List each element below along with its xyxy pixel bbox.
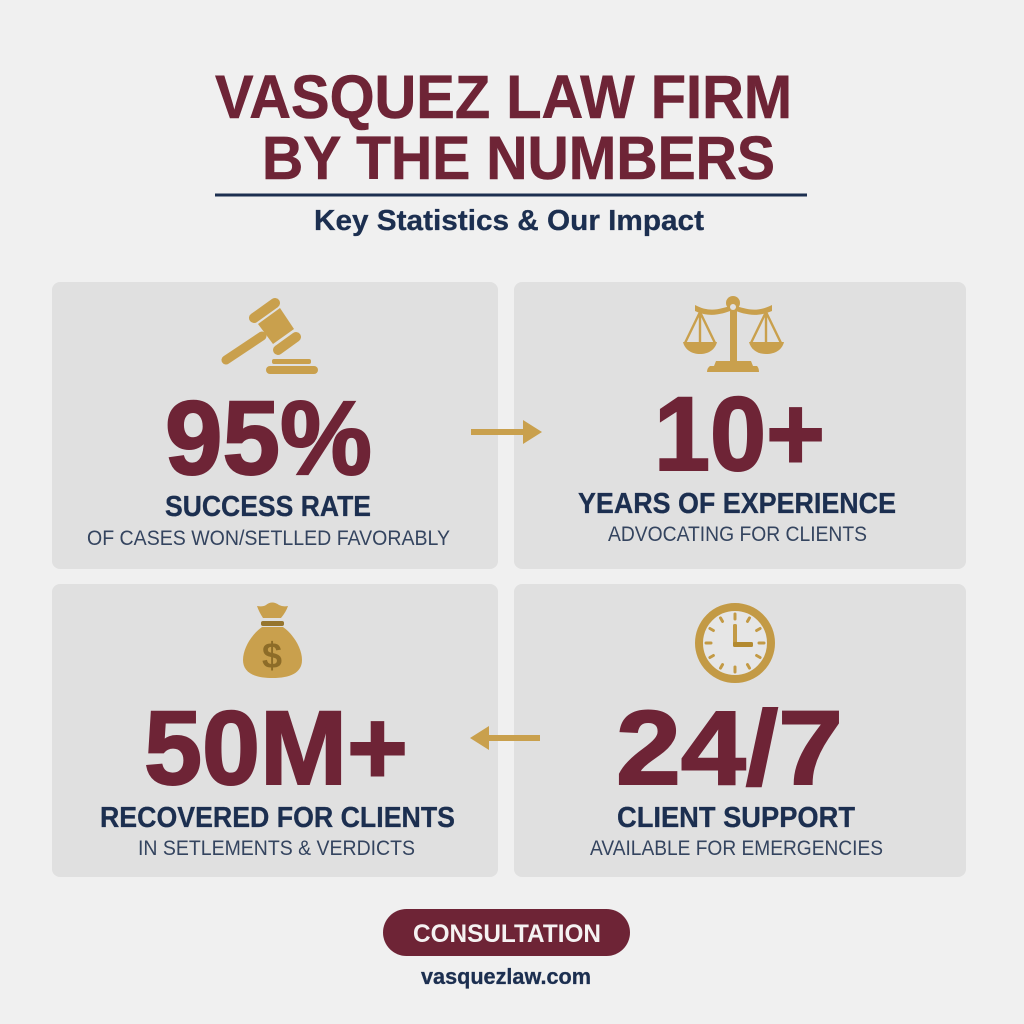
arrow: right: [471, 420, 542, 444]
stat description: AVAILABLE FOR EMERGENCIES: [590, 836, 883, 860]
stat label: success rate: SUCCESS RATE: [165, 491, 371, 523]
stat description: ADVOCATING FOR CLIENTS: [608, 522, 867, 546]
icon: scales of justice: [683, 296, 784, 372]
stat number: 50M+: 50M+: [144, 690, 408, 807]
icon: money bag: [243, 602, 302, 678]
stat number: 95%: 95%: [165, 380, 372, 497]
stat label: client support: CLIENT SUPPORT: [617, 802, 856, 834]
arrow: left: [470, 726, 540, 750]
stat number: 24/7: 24/7: [616, 690, 843, 807]
panel: experience: [514, 282, 966, 569]
subtitle: Key Statistics & Our Impact: [314, 205, 704, 237]
stat number: 10+: 10+: [654, 376, 825, 493]
title line 2: BY THE NUMBERS: [262, 124, 775, 192]
panel: recovered: [52, 584, 498, 877]
title line 1: VASQUEZ LAW FIRM: [215, 63, 792, 131]
website: vasquezlaw.com: [421, 964, 591, 989]
stat description: OF CASES WON/SETLLED FAVORABLY: [87, 526, 450, 550]
icon: clock: [699, 607, 771, 679]
panel: success rate: [52, 282, 498, 569]
panel: client support: [514, 584, 966, 877]
call to action button: [383, 909, 630, 956]
stat label: recovered for clients: RECOVERED FOR CLIENTS: [100, 802, 455, 834]
title rule: [215, 194, 807, 196]
stat description: IN SETLEMENTS & VERDICTS: [138, 836, 415, 860]
button label: CONSULTATION: [413, 920, 601, 948]
header block: [215, 63, 807, 237]
icon: money bag: $: [262, 635, 282, 676]
stat label: years of experience: YEARS OF EXPERIENCE: [578, 488, 896, 520]
icon: gavel: [226, 303, 318, 374]
